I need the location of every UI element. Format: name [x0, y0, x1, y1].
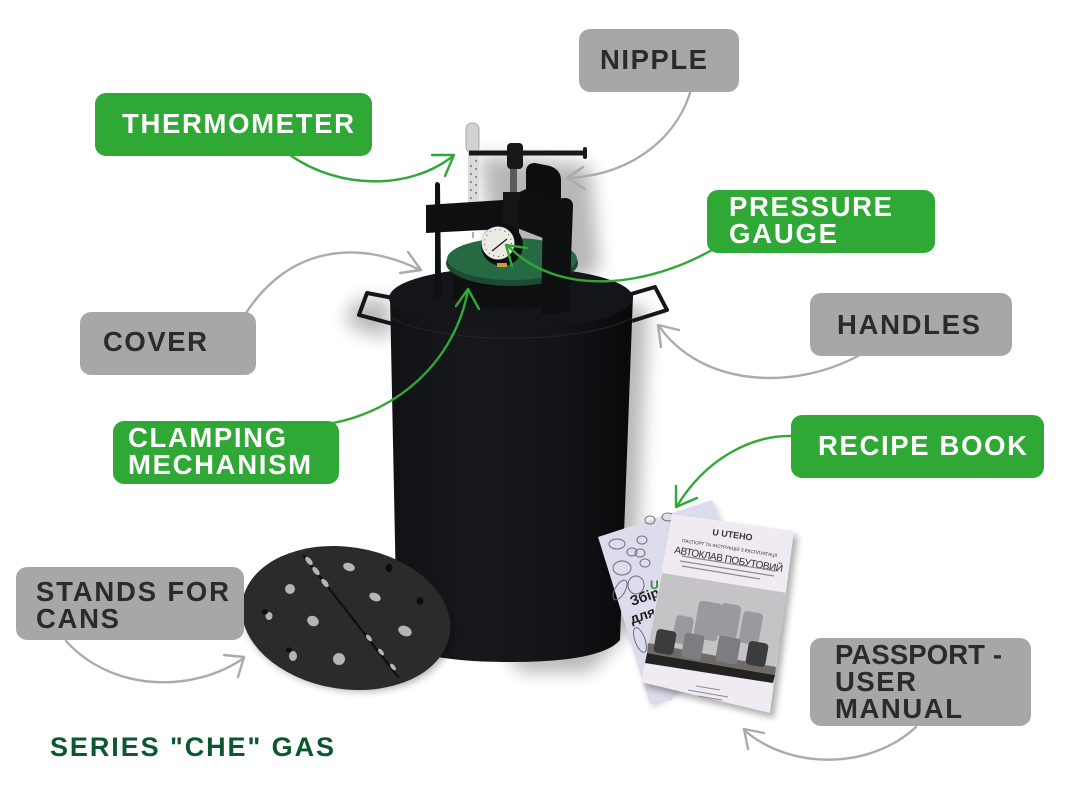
passport - user manual booklet: АВТОКЛАВ ПОБУТОВИЙ: [673, 543, 784, 575]
label: recipe book: RECIPE BOOK: [818, 430, 1027, 461]
passport - user manual booklet: ПАСПОРТ ТА ІНСТРУКЦІЯ З ЕКСПЛУАТАЦІЇ: [682, 537, 778, 558]
label: passport - user manual: USER: [835, 666, 916, 697]
thermometer: [466, 123, 479, 238]
shadows: [345, 155, 648, 672]
label: pressure gauge: GAUGE: [729, 218, 837, 249]
label: nipple: [579, 29, 739, 92]
top lid: [389, 267, 633, 329]
body seam: [392, 318, 632, 338]
right post: [541, 198, 573, 314]
label: pressure gauge: [707, 190, 935, 253]
label: stands for cans: CANS: [36, 603, 119, 634]
arrow: pressure gauge: [506, 245, 712, 281]
recipe book: [598, 500, 763, 708]
cross beam: [426, 188, 548, 240]
stands for cans: [231, 531, 462, 707]
passport - user manual booklet: U UTEHO: [712, 527, 753, 543]
left handle: [359, 293, 393, 324]
arrow: clamping mechanism: [333, 289, 479, 423]
cylinder body: [390, 295, 633, 662]
recipe book: Збірник: [628, 576, 685, 609]
autoclave product photo: [345, 123, 667, 672]
label: clamping mechanism: MECHANISM: [128, 449, 311, 480]
arrow: cover: [246, 252, 421, 313]
arrow: nipple: [567, 93, 690, 189]
label: stands for cans: [16, 567, 244, 640]
pressure gauge: [481, 224, 523, 267]
recipe book: для: [628, 603, 658, 627]
label: passport - user manual: MANUAL: [835, 693, 962, 724]
label: recipe book: [791, 415, 1044, 478]
arrow: recipe book: [676, 436, 792, 507]
neck: [453, 265, 566, 308]
right handle: [631, 287, 667, 321]
passport - user manual booklet: [641, 514, 798, 718]
label: pressure gauge: PRESSURE: [729, 191, 892, 222]
label: nipple: NIPPLE: [600, 44, 707, 75]
label: clamping mechanism: [113, 421, 339, 484]
label: stands for cans: STANDS FOR: [36, 576, 229, 607]
label: cover: [80, 312, 256, 375]
arrow: passport: [744, 727, 916, 760]
recipe book: U: [650, 578, 659, 592]
label: cover: COVER: [103, 326, 207, 357]
T-bar: [469, 150, 585, 156]
series title: SERIES "CHE" GAS: [50, 732, 334, 762]
arrow: stands for cans: [66, 641, 244, 682]
arrow: handles: [658, 325, 858, 378]
label: passport - user manual: PASSPORT -: [835, 639, 1002, 670]
arrow: thermometer: [290, 155, 454, 181]
label: thermometer: THERMOMETER: [122, 108, 354, 139]
label: thermometer: [95, 93, 372, 156]
clamp screw: [510, 167, 517, 195]
label: clamping mechanism: CLAMPING: [128, 422, 286, 453]
green plate: [446, 240, 578, 286]
label: handles: HANDLES: [837, 309, 980, 340]
rear bracket: [526, 163, 561, 205]
left post: [435, 182, 443, 298]
label: handles: [810, 293, 1012, 356]
label: passport - user manual: [810, 638, 1031, 726]
